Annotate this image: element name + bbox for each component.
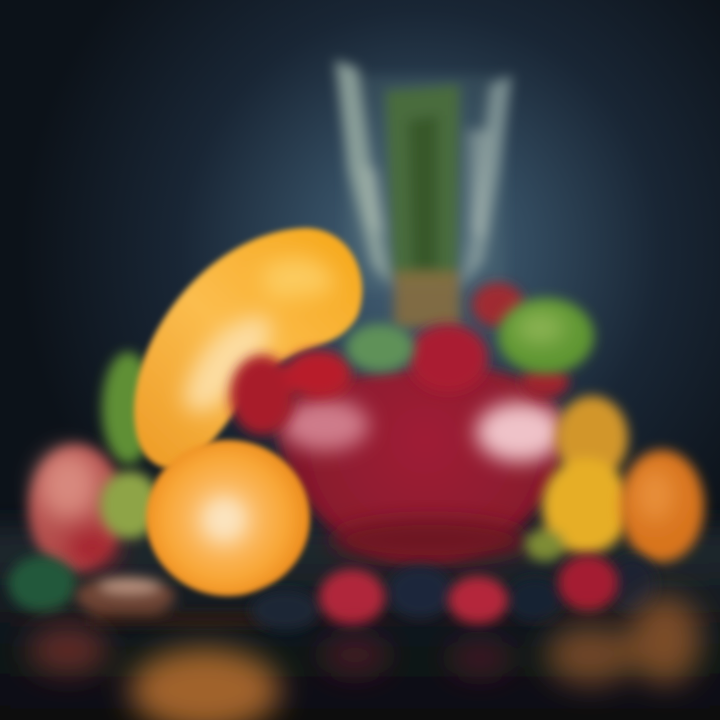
green fruit: beside peach bbox=[100, 471, 160, 539]
raspberries: red row bbox=[319, 555, 618, 625]
leaf: center green bbox=[346, 324, 414, 372]
yellow fruits: right cluster bbox=[525, 396, 630, 561]
reflections: fruit reflected in table bbox=[28, 596, 701, 720]
nuts: brown pieces at lower left bbox=[75, 576, 270, 626]
orange slice: large yellow crescent bbox=[134, 228, 362, 469]
shadow: apple base bbox=[330, 518, 530, 562]
green rind: behind orange slice bbox=[102, 352, 154, 464]
orange half: cut citrus bbox=[146, 440, 310, 596]
highlight: right white sheen bbox=[476, 402, 564, 462]
table: dark reflective surface bbox=[0, 530, 720, 720]
berries: red cluster on apple bbox=[230, 283, 569, 435]
leaf: bright green at right bbox=[498, 298, 594, 374]
blueberries: dark row bbox=[251, 557, 656, 630]
apple: large red fruit bbox=[275, 366, 565, 562]
pink fruit: peach at left bbox=[28, 444, 124, 572]
highlight: left white sheen bbox=[281, 399, 369, 451]
glass: pale blurred glass with herbs bbox=[335, 60, 512, 328]
orange fruit: far right bbox=[620, 450, 704, 562]
leaf: lower left bbox=[8, 556, 76, 612]
